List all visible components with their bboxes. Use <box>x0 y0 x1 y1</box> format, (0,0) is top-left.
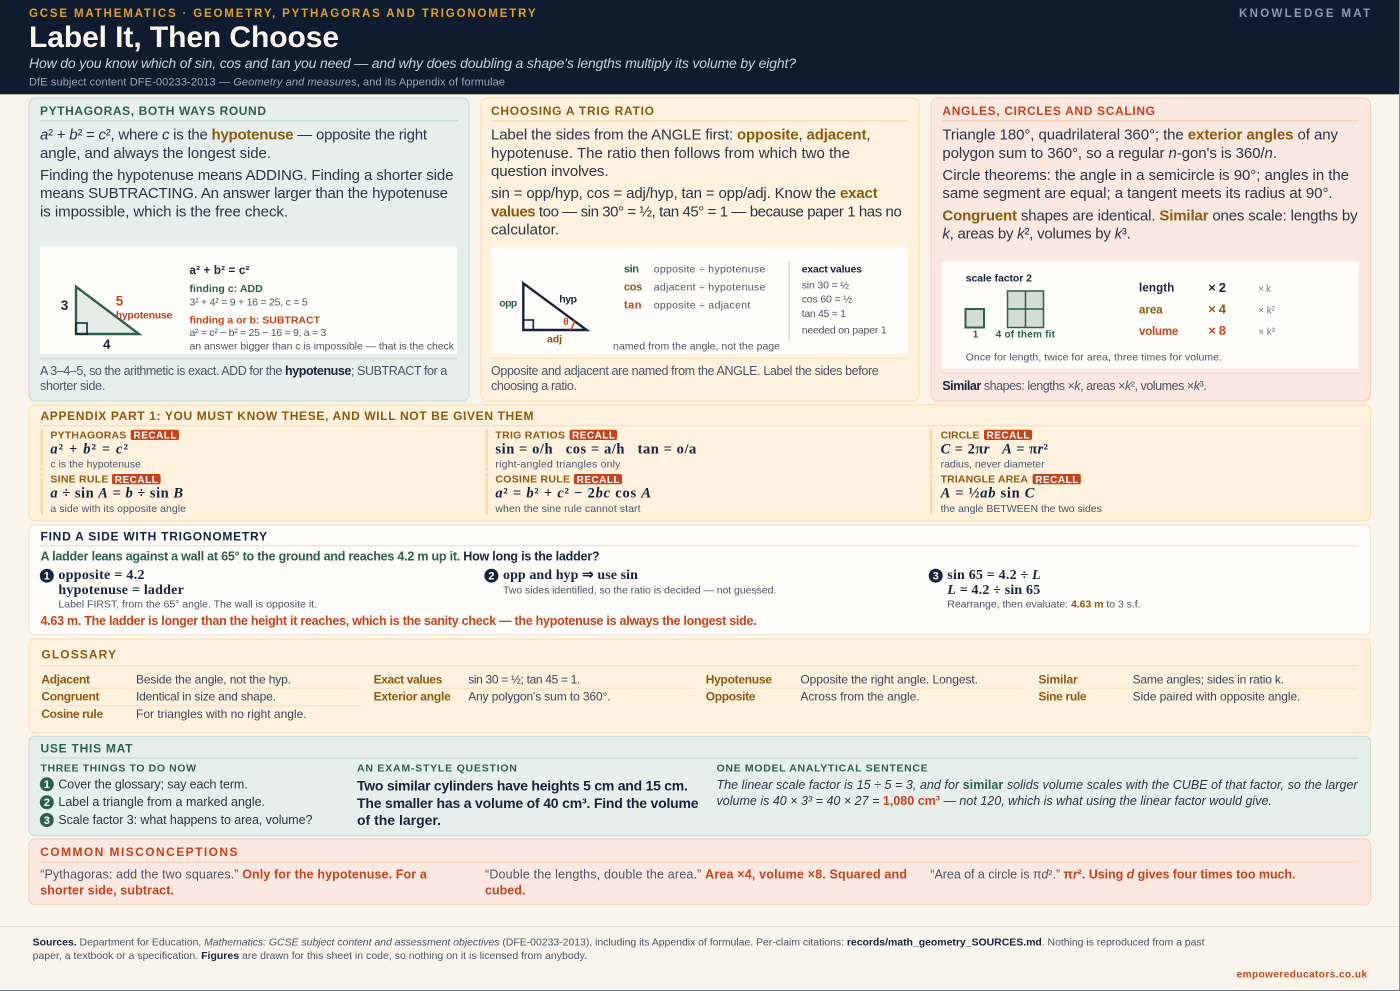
card: triangle area: RECALL <box>1035 475 1078 486</box>
glossary column 3 <box>706 672 1026 704</box>
body text: angle, and always the longest side. <box>40 145 271 162</box>
three things <box>40 762 312 827</box>
glossary column 1: Identical in size and shape. <box>136 690 276 704</box>
exam-style question: AN EXAM-STYLE QUESTION <box>357 762 517 774</box>
header band <box>0 0 1400 95</box>
website: empowereducators.co.uk <box>1237 970 1367 981</box>
exam-style question <box>357 762 699 828</box>
card: sine rule: a ÷ sin A = b ÷ sin B <box>50 486 183 502</box>
glossary column 4 <box>1038 672 1358 704</box>
step 3: sin 65 = 4.2 ÷ L <box>947 568 1041 583</box>
body text: sin = opp/hyp, cos = adj/hyp, tan = opp/adj. Know the exact <box>491 185 878 202</box>
glossary column 1 <box>41 672 362 721</box>
card: Pythagoras: PYTHAGORAS <box>50 430 126 442</box>
three things: THREE THINGS TO DO NOW <box>40 762 196 774</box>
card: Pythagoras: RECALL <box>134 431 176 442</box>
three things: 3 <box>44 815 50 827</box>
body text <box>40 126 454 220</box>
card: trig ratios <box>486 429 697 471</box>
card: circle: C = 2πr A = πr² <box>941 441 1048 457</box>
step 3: 3 <box>933 571 939 583</box>
card: sine rule: a side with its opposite angle <box>50 503 186 515</box>
card: cosine rule <box>486 473 651 515</box>
scale table: length <box>1139 283 1174 295</box>
glossary column 1: Congruent <box>41 690 100 704</box>
card: Pythagoras <box>40 429 179 471</box>
panel: choosing a trig ratio <box>481 98 919 401</box>
body text: k, areas by k², volumes by k³. <box>942 226 1131 242</box>
body text: is impossible, which is the free check. <box>40 204 288 220</box>
ratio table: opposite ÷ adjacent <box>654 300 750 312</box>
glossary column 4: Same angles; sides in ratio k. <box>1133 672 1284 686</box>
body text: calculator. <box>491 222 559 238</box>
scale table: volume <box>1139 326 1178 338</box>
icon: labelled triangle <box>499 283 587 346</box>
glossary column 4: Side paired with opposite angle. <box>1133 690 1300 704</box>
figure: scale factor <box>942 262 1359 369</box>
body text: a² + b² = c², where c is the hypotenuse — opposite the right <box>40 126 428 144</box>
knowledge mat tag: KNOWLEDGE MAT <box>1239 8 1370 20</box>
working: finding c: ADD <box>190 283 263 295</box>
glossary column 2: Exterior angle <box>374 690 451 704</box>
ratio table: adjacent ÷ hypotenuse <box>654 282 765 294</box>
glossary column 4: Sine rule <box>1038 690 1087 704</box>
body text: values too — sin 30° = ½, tan 45° = 1 — because paper 1 has no <box>491 204 902 220</box>
exact values: sin 30 = ½ <box>802 279 849 291</box>
icon: scaled squares: 4 of them fit <box>996 330 1056 341</box>
step 2 <box>484 568 776 596</box>
step 2: opp and hyp ⇒ use sin <box>503 568 638 583</box>
icon: scaled squares <box>966 273 1056 341</box>
glossary column 2: Any polygon's sum to 360°. <box>468 690 611 704</box>
scale table: × 8 <box>1208 323 1226 338</box>
body text: Congruent shapes are identical. Similar ones scale: lengths by <box>942 208 1358 224</box>
figure: trig ratios <box>492 247 908 354</box>
three things: Scale factor 3: what happens to area, volume? <box>58 813 312 827</box>
step 1: Label FIRST, from the 65° angle. The wall is opposite it. <box>58 598 317 610</box>
title: Label It, Then Choose <box>29 21 339 54</box>
ratio table: sin <box>624 264 639 276</box>
source line: DfE subject content DFE-00233-2013 — Geometry and measures, and its Appendix of formulae <box>29 76 505 88</box>
misconception 2: “Double the lengths, double the area.” Area ×4, volume ×8. Squared and <box>485 867 907 881</box>
glossary column 3: Hypotenuse <box>706 672 772 686</box>
card: triangle area: TRIANGLE AREA <box>941 474 1028 486</box>
heading: PYTHAGORAS, BOTH WAYS ROUND <box>40 104 266 118</box>
scale table: × k² <box>1258 306 1276 316</box>
body text: same segment are equal; a tangent meets its radius at 90°. <box>942 185 1333 202</box>
card: Pythagoras: a² + b² = c² <box>50 441 128 457</box>
step 3: L = 4.2 ÷ sin 65 <box>946 583 1040 598</box>
step 3: Rearrange, then evaluate: 4.63 m to 3 s.f. <box>947 598 1141 610</box>
model sentence: The linear scale factor is 15 ÷ 5 = 3, and for similar solids volume scales with the CUBE of that factor, so the larger <box>716 778 1358 792</box>
caption: choosing a ratio. <box>491 379 577 393</box>
card: cosine rule: when the sine rule cannot start <box>494 503 641 515</box>
scale table: × 2 <box>1208 280 1226 295</box>
card: cosine rule: RECALL <box>577 475 620 486</box>
body text: Finding the hypotenuse means ADDING. Finding a shorter side <box>40 167 454 184</box>
glossary column 2: Exact values <box>374 672 443 686</box>
step 2: 2 <box>488 571 494 583</box>
footer <box>0 926 1400 981</box>
icon: 3-4-5 triangle: 4 <box>103 337 111 352</box>
working: 3² + 4² = 9 + 16 = 25, c = 5 <box>190 296 308 308</box>
three things: Label a triangle from a marked angle. <box>58 795 265 809</box>
step 1: opposite = 4.2 <box>58 568 144 583</box>
model sentence: ONE MODEL ANALYTICAL SENTENCE <box>716 762 928 774</box>
scale table: × k <box>1258 284 1272 295</box>
icon: labelled triangle: hyp <box>559 294 577 306</box>
body text: question involves. <box>491 163 608 180</box>
exact values: cos 60 = ½ <box>802 294 852 306</box>
body text: hypotenuse. The ratio then follows from which two the <box>491 145 850 162</box>
caption: A 3–4–5, so the arithmetic is exact. ADD for the hypotenuse; SUBTRACT for a <box>40 364 447 378</box>
step 3 <box>929 568 1141 610</box>
card: trig ratios: right-angled triangles only <box>495 458 621 470</box>
card: sine rule: RECALL <box>115 475 158 486</box>
caption: Opposite and adjacent are named from the ANGLE. Label the sides before <box>491 364 879 378</box>
figure: triangle and working <box>40 247 457 354</box>
body text: Circle theorems: the angle in a semicircle is 90°; angles in the <box>942 167 1349 184</box>
body text <box>942 126 1358 242</box>
card: sine rule: SINE RULE <box>50 474 108 486</box>
ratio table: named from the angle, not the page <box>613 340 780 352</box>
icon: labelled triangle: θ <box>563 317 569 328</box>
card: sine rule <box>40 473 186 515</box>
icon: labelled triangle: adj <box>547 334 562 346</box>
glossary column 1: For triangles with no right angle. <box>136 707 307 721</box>
subtitle: How do you know which of sin, cos and tan you need — and why does doubling a shape's lengths multiply its volume by eight? <box>29 55 796 71</box>
caption <box>40 364 447 393</box>
panel: appendix recall formulae <box>29 405 1370 521</box>
working: an answer bigger than c is impossible — that is the check <box>190 340 455 352</box>
heading: USE THIS MAT <box>40 741 133 755</box>
step 1: hypotenuse = ladder <box>58 583 184 598</box>
three things: Cover the glossary; say each term. <box>58 778 248 792</box>
glossary column 1: Cosine rule <box>41 707 103 721</box>
panel: Pythagoras <box>29 98 469 401</box>
figure: scale factor: Once for length, twice for area, three times for volume. <box>966 351 1222 363</box>
caption: shorter side. <box>40 379 105 393</box>
model sentence <box>716 762 1358 808</box>
exact values: tan 45 = 1 <box>802 308 846 320</box>
caption: Similar shapes: lengths ×k, areas ×k², volumes ×k³. <box>942 379 1207 393</box>
misconception 1: shorter side, subtract. <box>40 883 174 897</box>
heading: COMMON MISCONCEPTIONS <box>40 845 238 859</box>
sources: Sources. Department for Education, Mathematics: GCSE subject content and assessment objectives (DFE-00233-2013), including its Appendix of formulae. Per-claim citations: records/math_geometry_SOURCES.md. Nothing is reproduced from a past <box>33 937 1205 949</box>
ratio table <box>613 264 780 352</box>
card: circle: CIRCLE <box>941 430 980 442</box>
body text: Label the sides from the ANGLE first: opposite, adjacent, <box>491 126 870 144</box>
ratio table: opposite ÷ hypotenuse <box>654 264 765 276</box>
card: circle: radius, never diameter <box>941 458 1045 470</box>
scale table: × 4 <box>1208 302 1227 316</box>
ratio table: tan <box>624 300 642 312</box>
ratio table: cos <box>624 282 642 294</box>
licence note: paper, a textbook or a specification. Figures are drawn for this sheet in code, so nothing on it is licensed from anybody. <box>33 950 587 962</box>
card: trig ratios: sin = o/h cos = a/h tan = o/a <box>495 441 697 457</box>
icon: 3-4-5 triangle: 5 <box>116 294 124 309</box>
three things: 1 <box>44 779 50 791</box>
glossary column 3: Opposite <box>706 690 756 704</box>
working <box>190 265 455 352</box>
card: cosine rule: COSINE RULE <box>495 474 570 486</box>
exam-style question: of the larger. <box>357 812 441 828</box>
working: a² = c² − b² = 25 − 16 = 9, a = 3 <box>190 327 326 339</box>
icon: scaled squares: 1 <box>973 330 979 341</box>
heading: GLOSSARY <box>41 648 116 662</box>
glossary column 1: Adjacent <box>41 672 90 686</box>
panel: find a side with trigonometry <box>29 525 1370 635</box>
conclusion: 4.63 m. The ladder is longer than the height it reaches, which is the sanity check — the hypotenuse is always the longest side. <box>40 614 757 628</box>
step 1 <box>40 568 317 610</box>
card: trig ratios: TRIG RATIOS <box>495 430 565 442</box>
icon: 3-4-5 triangle: hypotenuse <box>116 310 172 322</box>
panel: angles, circles and scaling <box>931 98 1370 401</box>
exam-style question: The smaller has a volume of 40 cm³. Find the volume <box>357 795 699 811</box>
exact values: exact values <box>802 264 862 276</box>
heading: ANGLES, CIRCLES AND SCALING <box>942 104 1155 118</box>
panel: use this mat <box>29 736 1370 836</box>
scale table: area <box>1139 304 1163 316</box>
scale table: × k³ <box>1258 327 1276 338</box>
misconception 1: “Pythagoras: add the two squares.” Only for the hypotenuse. For a <box>40 867 428 881</box>
working: finding a or b: SUBTRACT <box>190 314 321 326</box>
exam-style question: Two similar cylinders have heights 5 cm and 15 cm. <box>357 778 688 794</box>
icon: 3-4-5 triangle: 3 <box>61 298 69 313</box>
card: trig ratios: RECALL <box>572 431 615 442</box>
model sentence: volume is 40 × 3³ = 40 × 27 = 1,080 cm³ — not 120, which is what using the linear factor would give. <box>716 794 1272 808</box>
card: triangle area: A = ½ab sin C <box>940 486 1035 502</box>
glossary column 3: Opposite the right angle. Longest. <box>800 672 978 686</box>
misconception 2: cubed. <box>485 883 525 897</box>
scale table <box>1139 280 1276 338</box>
card: circle: RECALL <box>986 431 1030 442</box>
question: A ladder leans against a wall at 65° to the ground and reaches 4.2 m up it. How long is the ladder? <box>40 550 600 564</box>
panel: glossary <box>29 639 1370 733</box>
glossary column 2: sin 30 = ½; tan 45 = 1. <box>468 672 580 686</box>
heading: FIND A SIDE WITH TRIGONOMETRY <box>40 530 267 544</box>
body text: Triangle 180°, quadrilateral 360°; the exterior angles of any <box>942 126 1338 144</box>
glossary column 3: Across from the angle. <box>800 690 920 704</box>
heading: APPENDIX PART 1: YOU MUST KNOW THESE, AND WILL NOT BE GIVEN THEM <box>40 409 534 423</box>
step 1: 1 <box>44 571 50 583</box>
panel: common misconceptions <box>29 839 1370 905</box>
body text <box>491 126 902 238</box>
body text: polygon sum to 360°, so a regular n-gon's is 360/n. <box>942 145 1277 162</box>
icon: scaled squares: scale factor 2 <box>966 273 1032 285</box>
working: a² + b² = c² <box>190 265 249 277</box>
glossary column 2 <box>374 672 694 704</box>
card: triangle area <box>930 473 1102 515</box>
exact values <box>802 264 887 337</box>
misconception 2 <box>485 867 907 897</box>
misconception 1 <box>40 867 428 897</box>
body text: means SUBTRACTING. An answer larger than the hypotenuse <box>40 185 448 202</box>
card: Pythagoras: c is the hypotenuse <box>50 458 141 470</box>
card: circle <box>930 429 1048 471</box>
glossary column 4: Similar <box>1038 672 1078 686</box>
card: triangle area: the angle BETWEEN the two sides <box>941 503 1102 515</box>
glossary column 1: Beside the angle, not the hyp. <box>136 672 291 686</box>
icon: 3-4-5 triangle <box>61 287 172 352</box>
three things: 2 <box>44 797 50 809</box>
card: cosine rule: a² = b² + c² − 2bc cos A <box>495 486 651 502</box>
step 2: Two sides identified, so the ratio is decided — not guessed. <box>503 584 776 596</box>
caption <box>491 364 879 393</box>
eyebrow: GCSE MATHEMATICS · GEOMETRY, PYTHAGORAS AND TRIGONOMETRY <box>29 8 536 20</box>
heading: CHOOSING A TRIG RATIO <box>491 104 654 118</box>
misconception 3: “Area of a circle is πd².” πr². Using d gives four times too much. <box>930 867 1296 881</box>
icon: labelled triangle: opp <box>499 298 517 310</box>
exact values: needed on paper 1 <box>802 325 887 337</box>
